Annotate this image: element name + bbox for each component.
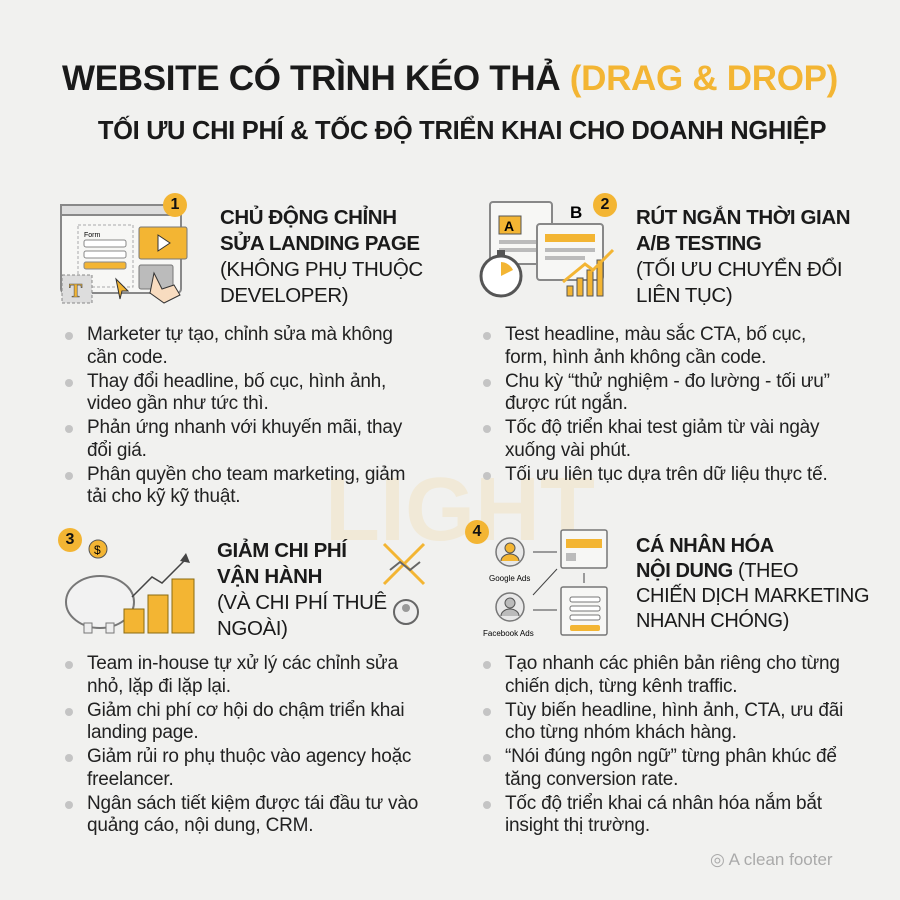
badge 3: 3 — [66, 531, 74, 548]
heading 4: NỘI DUNG (THEO — [636, 560, 798, 582]
title: WEBSITE CÓ TRÌNH KÉO THẢ (DRAG & DROP) — [62, 59, 838, 98]
subtitle: TỐI ƯU CHI PHÍ & TỐC ĐỘ TRIỂN KHAI CHO DOANH NGHIỆP — [98, 117, 826, 145]
icon: piggy bank and coins: $ — [94, 543, 101, 557]
icon: A/B test: B — [570, 203, 582, 222]
badge 3 — [58, 528, 82, 552]
bullets 1: Phân quyền cho team marketing, giảm tải cho kỹ kỹ thuật. — [87, 464, 405, 507]
bullets 2: Test headline, màu sắc CTA, bố cục, form, hình ảnh không cần code. — [505, 324, 806, 368]
badge 4: 4 — [473, 523, 481, 540]
icon: outsourcing crossed — [383, 543, 425, 625]
icon: drag-drop editor: Form — [84, 232, 100, 239]
bullets 3 — [65, 653, 418, 836]
bullets 3: Ngân sách tiết kiệm được tái đầu tư vào quảng cáo, nội dung, CRM. — [87, 792, 418, 836]
bullets 2: Chu kỳ “thử nghiệm - đo lường - tối ưu” được rút ngắn. — [505, 370, 830, 414]
heading 3: GIẢM CHI PHÍ — [217, 539, 347, 562]
bullets 4: Tốc độ triển khai cá nhân hóa nắm bắt insight thị trường. — [505, 792, 822, 836]
panel 4: personalization — [465, 520, 869, 836]
panel 1: landing page — [60, 193, 423, 507]
bullets 1: Phản ứng nhanh với khuyến mãi, thay đổi giá. — [87, 417, 402, 460]
heading 3: (VÀ CHI PHÍ THUÊ — [217, 591, 387, 614]
heading 2: A/B TESTING — [636, 232, 761, 255]
bullets 1: Marketer tự tạo, chỉnh sửa mà không cần code. — [87, 324, 393, 368]
bullets 4: Tạo nhanh các phiên bản riêng cho từng chiến dịch, từng kênh traffic. — [505, 653, 840, 696]
bullets 2 — [483, 323, 830, 484]
heading 3: NGOÀI) — [217, 617, 288, 640]
icon: ads to pages: Facebook Ads — [483, 629, 534, 638]
bullets 2: Tối ưu liên tục dựa trên dữ liệu thực tế. — [505, 464, 828, 484]
bullets 4: “Nói đúng ngôn ngữ” từng phân khúc để tăng conversion rate. — [505, 746, 837, 790]
badge 1: 1 — [171, 196, 179, 213]
bullets 4 — [483, 653, 843, 836]
badge 1 — [163, 193, 187, 217]
bullets 2: Tốc độ triển khai test giảm từ vài ngày xuống vài phút. — [505, 417, 819, 460]
bullets 4: Tùy biến headline, hình ảnh, CTA, ưu đãi cho từng nhóm khách hàng. — [505, 700, 843, 743]
heading 4: CÁ NHÂN HÓA — [636, 535, 774, 557]
heading 1: (KHÔNG PHỤ THUỘC — [220, 258, 423, 281]
icon: A/B test: A — [504, 218, 514, 234]
icon: ads to pages: Google Ads — [489, 574, 530, 583]
icon: ads to pages — [483, 529, 608, 638]
heading 1: DEVELOPER) — [220, 284, 348, 307]
panel 2: A/B testing — [480, 193, 850, 484]
badge 4 — [465, 520, 489, 544]
bullets 3: Giảm chi phí cơ hội do chậm triển khai landing page. — [87, 700, 404, 743]
heading 4: CHIẾN DỊCH MARKETING — [636, 585, 869, 607]
panel 3: cost — [58, 528, 425, 836]
heading 2: (TỐI ƯU CHUYỂN ĐỔI — [636, 258, 842, 281]
icon: drag-drop editor: T — [69, 280, 83, 302]
icon: A/B test — [480, 201, 614, 298]
footer: ◎ A clean footer — [710, 850, 833, 869]
badge 2 — [593, 193, 617, 217]
heading 2: LIÊN TỤC) — [636, 284, 732, 307]
heading 3 — [217, 538, 387, 640]
bullets 3: Team in-house tự xử lý các chỉnh sửa nhỏ, lặp đi lặp lại. — [87, 653, 398, 696]
heading 1: CHỦ ĐỘNG CHỈNH — [220, 206, 397, 229]
watermark: LIGHT — [325, 460, 595, 560]
bullets 3: Giảm rủi ro phụ thuộc vào agency hoặc freelancer. — [87, 746, 411, 790]
heading 3: VẬN HÀNH — [217, 565, 322, 588]
heading 4 — [636, 534, 869, 632]
icon: drag-drop editor — [60, 204, 188, 304]
icon: piggy bank and coins — [65, 540, 194, 634]
heading 1 — [220, 206, 423, 307]
bullets 1 — [65, 324, 405, 507]
heading 4: NHANH CHÓNG) — [636, 610, 789, 632]
heading 2: RÚT NGẮN THỜI GIAN — [636, 206, 850, 229]
badge 2: 2 — [601, 196, 609, 213]
heading 1: SỬA LANDING PAGE — [220, 232, 420, 255]
heading 2 — [636, 206, 850, 307]
bullets 1: Thay đổi headline, bố cục, hình ảnh, video gần như tức thì. — [87, 370, 386, 414]
